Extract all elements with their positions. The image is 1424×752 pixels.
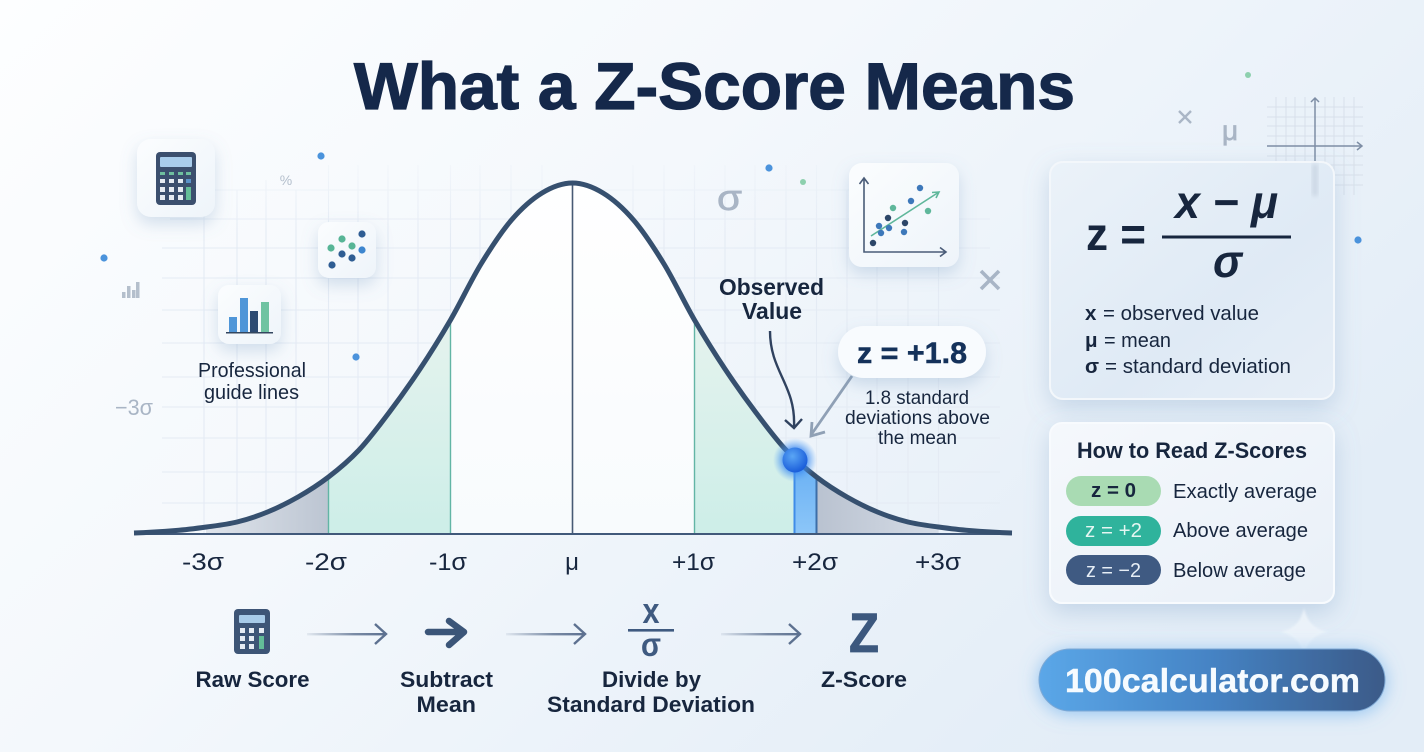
icon: bold arrow xyxy=(428,621,464,645)
observed point xyxy=(773,438,817,482)
legend: variables: σ xyxy=(1085,355,1099,378)
legend: variables: = mean xyxy=(1104,329,1171,352)
faint minus three sigma: −3σ xyxy=(115,395,153,420)
axis labels xyxy=(182,549,961,576)
axis xyxy=(134,533,1012,535)
icon: x over sigma: σ xyxy=(641,626,661,663)
faint sigma: σ xyxy=(717,177,742,218)
z value caption: the mean xyxy=(878,428,957,449)
row: z = -2 xyxy=(1066,555,1306,585)
process step: divide by standard deviation: Standard Deviation xyxy=(547,692,755,717)
bell curve chart xyxy=(134,170,1012,534)
arrow: step three to four xyxy=(721,624,800,644)
observed value label: Value xyxy=(742,298,802,324)
icon card: bar chart xyxy=(218,285,281,344)
curve xyxy=(134,183,1012,533)
icon: calculator xyxy=(234,609,270,654)
axis labels: +1σ xyxy=(672,549,715,576)
legend: variables xyxy=(1085,302,1291,378)
axis labels: -1σ xyxy=(429,549,467,576)
website button xyxy=(1039,649,1385,711)
axis labels: -3σ xyxy=(182,549,224,576)
arrow: observed value to point xyxy=(770,331,802,428)
row: z = 0 xyxy=(1066,476,1317,506)
faint mu: μ xyxy=(1222,115,1238,146)
guide lines caption xyxy=(198,360,306,404)
process step: subtract mean: Subtract xyxy=(400,667,494,692)
row: z = 0: Exactly average xyxy=(1173,480,1317,503)
panel heading: How to Read Z-Scores xyxy=(1077,438,1307,463)
sparkle xyxy=(1280,608,1328,656)
row: z = +2 xyxy=(1066,516,1308,546)
formula: σ xyxy=(1213,235,1243,287)
row: z = +2: Above average xyxy=(1173,519,1308,542)
axis labels: μ xyxy=(565,549,579,576)
process step: z-score: Z-Score xyxy=(821,667,907,692)
z value pill xyxy=(838,326,986,378)
decorative dots xyxy=(100,72,1362,361)
row: z = -2: Below average xyxy=(1173,559,1306,582)
faint multiply sign xyxy=(981,271,999,289)
process step: divide by standard deviation xyxy=(547,590,755,717)
website button: 100calculator.com xyxy=(1065,662,1360,699)
row: z = -2: z = −2 xyxy=(1086,560,1141,582)
process step: divide by standard deviation: Divide by xyxy=(602,667,702,692)
faint bar icon xyxy=(122,282,140,298)
row: z = +2: z = +2 xyxy=(1085,520,1142,542)
icon: letter Z: Z xyxy=(849,601,879,664)
icon card: calculator xyxy=(137,139,215,217)
observed value label: Observed xyxy=(719,274,824,300)
formula: x − μ xyxy=(1172,176,1278,228)
mini coordinate grid xyxy=(1267,97,1363,195)
arrow: z value to point xyxy=(811,376,852,436)
arrow: step two to three xyxy=(506,624,585,644)
icon: x over sigma: x xyxy=(642,590,660,631)
title: What a Z-Score Means xyxy=(354,49,1075,123)
faint multiply top right xyxy=(1179,111,1191,123)
process step: subtract mean: Mean xyxy=(416,692,476,717)
process step: raw score: Raw Score xyxy=(196,667,310,692)
process step: subtract mean xyxy=(400,621,494,717)
axis labels: -2σ xyxy=(305,549,347,576)
legend: variables: = standard deviation xyxy=(1105,355,1291,378)
z value pill: z = +1.8 xyxy=(857,337,967,370)
sigma guide lines xyxy=(328,183,816,534)
icon card: cluster dots xyxy=(318,222,376,278)
z value caption: deviations above xyxy=(845,408,990,429)
shaded regions xyxy=(206,170,938,534)
row: z = 0: z = 0 xyxy=(1091,480,1136,502)
guide lines caption: Professional xyxy=(198,360,306,382)
how to read panel xyxy=(1050,423,1334,603)
arrow: step one to two xyxy=(307,624,386,644)
legend: variables: x xyxy=(1085,302,1097,325)
guide lines caption: guide lines xyxy=(204,382,299,404)
z value caption: 1.8 standard xyxy=(865,388,969,409)
legend: variables: μ xyxy=(1085,329,1098,352)
z value caption xyxy=(845,388,990,449)
legend: variables: = observed value xyxy=(1103,302,1259,325)
faint percent symbol: % xyxy=(280,172,292,188)
observed value label xyxy=(719,274,824,324)
axis labels: +3σ xyxy=(915,549,961,576)
icon card: scatter plot xyxy=(849,163,959,267)
icon: x over sigma xyxy=(628,590,674,663)
formula panel xyxy=(1050,162,1334,399)
axis labels: +2σ xyxy=(792,549,838,576)
formula xyxy=(1086,176,1291,287)
process step: z-score xyxy=(821,601,907,692)
background grid xyxy=(162,165,1000,534)
process step: raw score xyxy=(196,609,310,692)
formula: z = xyxy=(1086,208,1146,260)
